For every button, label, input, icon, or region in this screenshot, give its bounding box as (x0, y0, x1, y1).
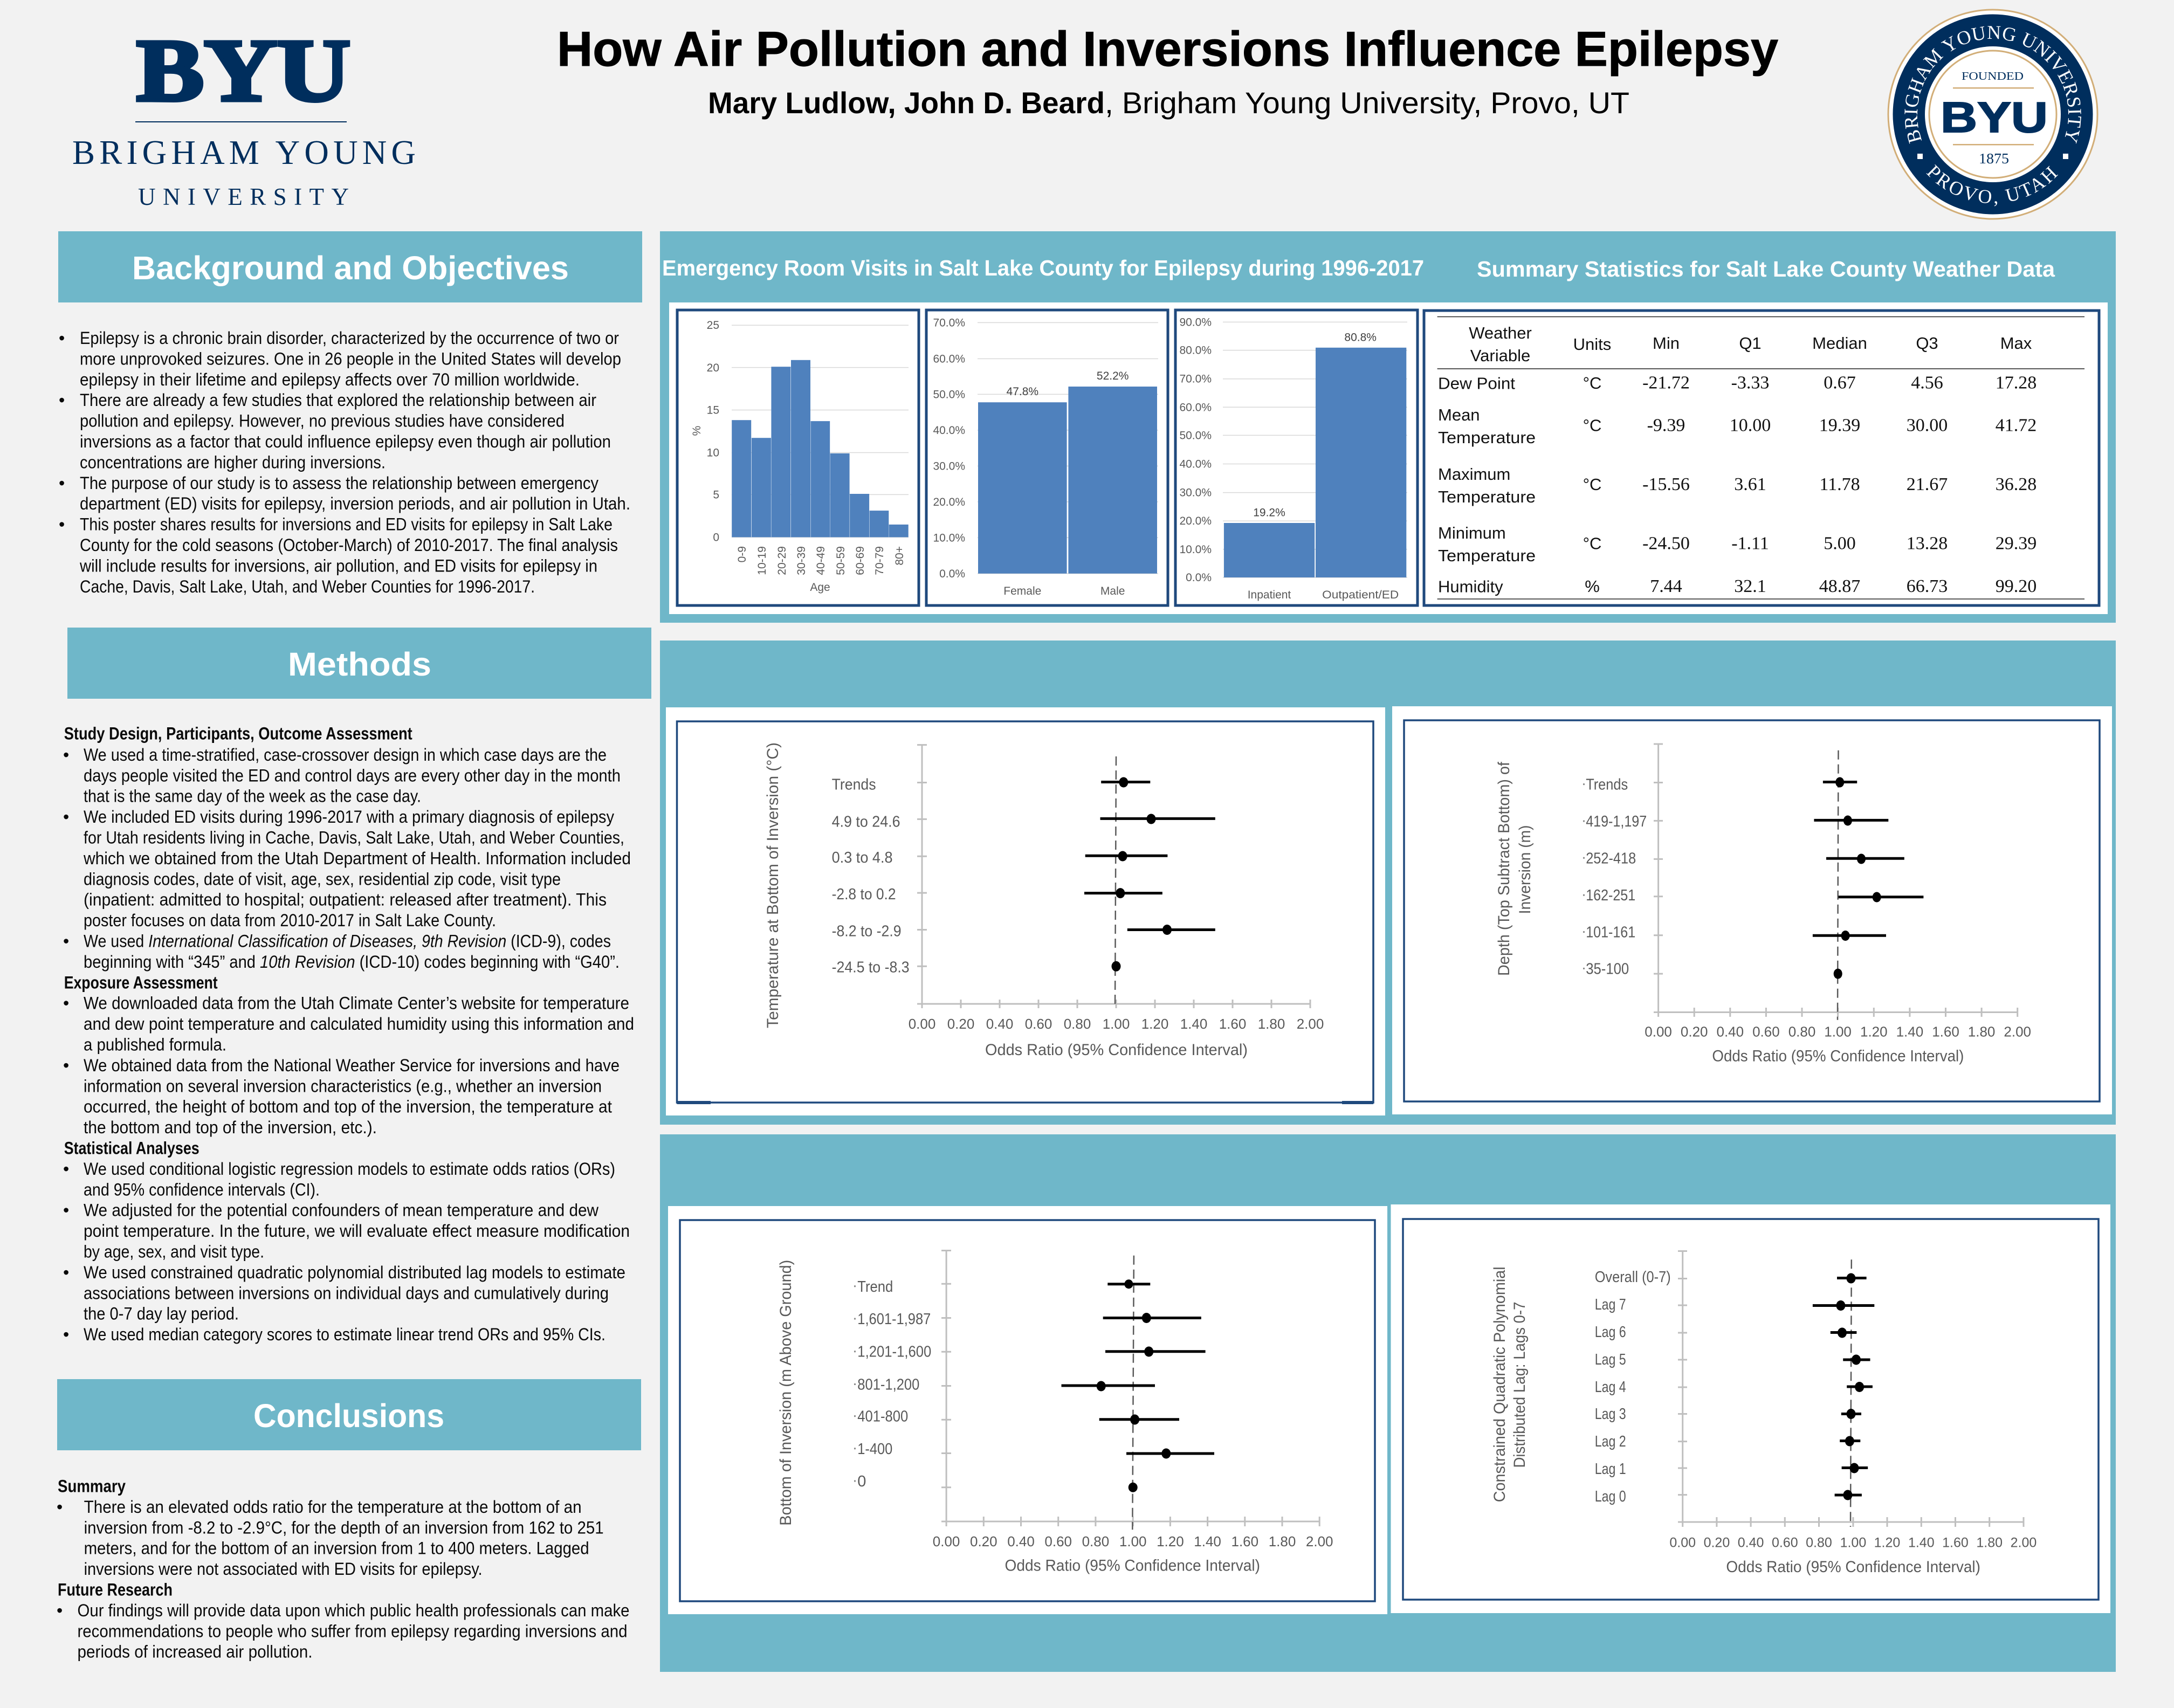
text block: study design: which we obtained from the Utah Department of Health. Information included (83, 849, 631, 868)
text block: statistical analyses: We used constrained quadratic polynomial distributed lag models to estimate (84, 1263, 625, 1282)
bar chart: visit type: 19.2% (1253, 507, 1285, 519)
text block: statistical analyses (63, 1139, 630, 1344)
bar chart: sex distribution: 52.2% (1097, 370, 1129, 382)
heading: conclusions: Conclusions (253, 1397, 444, 1434)
table: summary statistics for weather data: Dew Point (1438, 374, 1515, 392)
forest plot: temperature at bottom of inversion: 4.9 to 24.6 (832, 813, 900, 830)
forest plot: depth of inversion: 162-251 (1586, 887, 1635, 904)
text block: statistical analyses: We used median category scores to estimate linear trend ORs and 95% CIs. (84, 1325, 606, 1344)
table: summary statistics for weather data: 7.44 (1650, 576, 1682, 596)
bar chart: age distribution: 15 (707, 404, 719, 416)
forest plot: temperature at bottom of inversion: 1.40 (1180, 1016, 1207, 1032)
panel: background and objectives (58, 231, 642, 596)
text block: summary: Summary (58, 1476, 126, 1496)
text block: future research: • (57, 1601, 63, 1620)
forest plot: bottom of inversion: 2.00 (1306, 1533, 1333, 1549)
text block: study design: We used a time-stratified, case-crossover design in which case days are the (84, 745, 607, 765)
forest plot: distributed lag: Constrained Quadratic Polynomial (1491, 1266, 1509, 1502)
forest plot: distributed lag: Odds Ratio (95% Confidence Interval) (1726, 1558, 1980, 1576)
forest plot: depth of inversion (1404, 720, 2100, 1101)
table: summary statistics for weather data: 19.39 (1819, 415, 1860, 436)
table: summary statistics for weather data (1424, 311, 2099, 605)
authors and affiliation: , Brigham Young University, Provo, UT (1105, 86, 1629, 120)
text block: exposure assessment: • (63, 994, 69, 1013)
forest plot: temperature at bottom of inversion (677, 721, 1373, 1103)
bar chart: sex distribution: Female (1003, 585, 1041, 597)
text block: background bullets: department (ED) visits for epilepsy, inversion periods, and air pollution in Utah. (80, 494, 630, 513)
forest plot: distributed lag: 1.60 (1942, 1535, 1969, 1551)
bar chart: visit type: 10.0% (1179, 543, 1212, 556)
text block: background bullets: • (59, 390, 65, 410)
text block: future research (57, 1580, 630, 1662)
forest plot: bottom of inversion: 1-400 (857, 1441, 892, 1458)
bar chart: age distribution: 60-69 (854, 546, 866, 575)
bar chart: age distribution (677, 310, 919, 605)
forest plot: distributed lag: Distributed Lag: Lags 0-7 (1511, 1301, 1529, 1468)
table: summary statistics for weather data: 36.28 (1996, 474, 2037, 494)
forest plot: bottom of inversion: Bottom of Inversion (m Above Ground) (777, 1260, 795, 1526)
bar chart: sex distribution: 20.0% (933, 496, 965, 508)
text block: exposure assessment: • (63, 1056, 69, 1075)
icon: BYU seal: PROVO, UTAH (1926, 164, 2058, 206)
text block: statistical analyses: • (63, 1159, 69, 1179)
text block: study design: • (63, 932, 69, 951)
forest plot: temperature at bottom of inversion: 0.40 (986, 1016, 1013, 1032)
table: summary statistics for weather data: Minimum (1438, 524, 1506, 542)
forest plot: distributed lag: Lag 3 (1595, 1406, 1626, 1423)
table: summary statistics for weather data: 3.61 (1734, 474, 1766, 494)
bar chart: visit type: 50.0% (1179, 429, 1212, 442)
table: summary statistics for weather data: 30.00 (1907, 415, 1948, 436)
forest plot: depth of inversion: 0.20 (1681, 1023, 1708, 1039)
text block: statistical analyses: Statistical Analyses (64, 1139, 199, 1158)
forest plot: depth of inversion: Trends (1586, 776, 1628, 794)
forest plot: distributed lag (1403, 1219, 2099, 1600)
text block: exposure assessment: and dew point temperature and calculated humidity using this information and (84, 1014, 634, 1034)
table: summary statistics for weather data: Variable (1470, 346, 1530, 365)
forest plot: distributed lag: Lag 6 (1595, 1324, 1626, 1341)
forest plot: distributed lag: 0.80 (1806, 1535, 1832, 1551)
forest plot: distributed lag: Overall (0-7) (1595, 1269, 1671, 1286)
icon: BYU seal: BRIGHAM YOUNG UNIVERSITY (1904, 26, 2081, 144)
forest plot: temperature at bottom of inversion: 1.60 (1219, 1016, 1246, 1032)
forest plot: distributed lag: Lag 7 (1595, 1296, 1626, 1313)
forest plot: distributed lag: Lag 0 (1595, 1488, 1626, 1505)
text block: future research: Future Research (58, 1580, 173, 1599)
heading: methods: Methods (288, 646, 431, 683)
text block: summary: • (57, 1497, 63, 1517)
forest plot: bottom of inversion: 1.80 (1269, 1533, 1296, 1549)
table: summary statistics for weather data: -24.50 (1642, 534, 1690, 553)
bar chart: visit type: 80.8% (1344, 332, 1377, 344)
bar chart: sex distribution: Male (1100, 585, 1125, 597)
bar chart: sex distribution: 50.0% (933, 388, 965, 401)
forest plot: bottom of inversion: 1.00 (1119, 1533, 1147, 1549)
table: summary statistics for weather data: Min (1653, 334, 1680, 353)
bar chart: age distribution: 5 (713, 488, 719, 501)
text block: summary: There is an elevated odds ratio for the temperature at the bottom of an (84, 1497, 582, 1517)
forest plot: bottom of inversion: 0.00 (933, 1533, 960, 1549)
forest plot: distributed lag: 0.20 (1704, 1535, 1730, 1551)
forest plot: depth of inversion: 1.00 (1824, 1023, 1852, 1039)
forest plot: distributed lag: 0.40 (1738, 1535, 1764, 1551)
forest plot: distributed lag: 1.20 (1874, 1535, 1900, 1551)
text block: background bullets: This poster shares results for inversions and ED visits for epilepsy in Salt Lake (80, 515, 613, 534)
text block: exposure assessment: We downloaded data from the Utah Climate Center’s website for temperature (84, 994, 629, 1013)
forest plot: depth of inversion: 101-161 (1586, 924, 1635, 941)
icon: BYU seal (1887, 9, 2099, 220)
text block: study design: • (63, 745, 69, 765)
table: summary statistics for weather data: -1.11 (1731, 534, 1769, 553)
forest plot: distributed lag: 2.00 (2011, 1535, 2037, 1551)
forest plot: depth of inversion: 1.60 (1932, 1023, 1959, 1039)
panel: conclusions (57, 1379, 641, 1662)
bar chart: age distribution: 20-29 (776, 546, 788, 575)
bar chart: sex distribution: 30.0% (933, 460, 965, 472)
forest plot: depth of inversion: 0.60 (1752, 1023, 1780, 1039)
bar chart: visit type: 70.0% (1179, 373, 1212, 385)
table: summary statistics for weather data: Weather (1469, 323, 1532, 342)
logo: BYU wordmark (72, 21, 416, 210)
bar chart: sex distribution: 40.0% (933, 424, 965, 437)
heading: emergency room visits: Emergency Room Visits in Salt Lake County for Epilepsy during 1996-2017 (662, 256, 1424, 280)
table: summary statistics for weather data: Q1 (1739, 334, 1762, 353)
forest plot: bottom of inversion: 401-800 (857, 1408, 908, 1425)
forest plot: bottom of inversion: 1.20 (1157, 1533, 1184, 1549)
text block: exposure assessment: information on several inversion characteristics (e.g., whether an inversion (84, 1076, 602, 1096)
bar chart: sex distribution: 0.0% (939, 568, 965, 580)
table: summary statistics for weather data: -21.72 (1642, 373, 1690, 392)
bar chart: age distribution: 30-39 (795, 546, 808, 575)
forest plot: depth of inversion: 1.80 (1968, 1023, 1995, 1039)
text block: background bullets: • (59, 328, 65, 348)
text block: study design: for Utah residents living in Cache, Davis, Salt Lake, Utah, and Weber Counties, (84, 828, 624, 848)
forest plot: distributed lag: Lag 4 (1595, 1379, 1626, 1396)
forest plot: temperature at bottom of inversion: Temperature at Bottom of Inversion (°C) (764, 742, 782, 1028)
authors and affiliation (708, 86, 1629, 120)
table: summary statistics for weather data: 99.20 (1996, 576, 2037, 596)
text block: study design: diagnosis codes, date of visit, age, sex, residential zip code, visit type (84, 869, 561, 889)
forest plot: distributed lag: 0.00 (1669, 1535, 1696, 1551)
bar chart: visit type: 90.0% (1179, 316, 1212, 328)
bar chart: visit type: 80.0% (1179, 345, 1212, 357)
forest plot: depth of inversion: 1.40 (1896, 1023, 1923, 1039)
text block: future research: periods of increased air pollution. (78, 1642, 313, 1662)
forest plot: temperature at bottom of inversion: Trends (832, 776, 876, 794)
table: summary statistics for weather data: -15.56 (1642, 474, 1690, 494)
text block: summary: inversions were not associated with ED visits for epilepsy. (84, 1559, 483, 1579)
forest plot: depth of inversion: 35-100 (1586, 960, 1629, 977)
table: summary statistics for weather data: °C (1583, 374, 1601, 392)
text block: background bullets: • (59, 515, 65, 534)
forest plot: distributed lag: Lag 2 (1595, 1433, 1626, 1450)
forest plot: depth of inversion: 0.00 (1645, 1023, 1672, 1039)
text block: statistical analyses: and 95% confidence intervals (CI). (84, 1180, 320, 1199)
text block: statistical analyses: • (63, 1201, 69, 1220)
bar chart: age distribution: 10-19 (756, 546, 768, 575)
text block: study design: • (63, 807, 69, 827)
text block: background bullets: concentrations are higher during inversions. (80, 452, 386, 472)
forest plot: distributed lag: Lag 1 (1595, 1461, 1626, 1478)
table: summary statistics for weather data: 41.72 (1996, 415, 2037, 436)
text block: background bullets: will include results for inversions, air pollution, and ED visits for epilepsy in (79, 556, 597, 575)
forest plot: temperature at bottom of inversion: 1.00 (1103, 1016, 1130, 1032)
forest plot: depth of inversion: 1.20 (1860, 1023, 1888, 1039)
table: summary statistics for weather data: -3.33 (1731, 373, 1769, 392)
forest plot: temperature at bottom of inversion: 2.00 (1297, 1016, 1324, 1032)
forest plot: bottom of inversion: 1,601-1,987 (857, 1311, 931, 1328)
forest plot: temperature at bottom of inversion: 0.00 (909, 1016, 935, 1032)
logo: BYU wordmark: UNIVERSITY (138, 183, 349, 210)
bar chart: age distribution: 10 (707, 446, 719, 459)
forest plot: bottom of inversion (680, 1220, 1375, 1601)
text block: exposure assessment: the bottom and top of the inversion, etc.). (84, 1118, 377, 1137)
bar chart: sex distribution (926, 310, 1168, 605)
text block: background bullets: County for the cold seasons (October-March) of 2010-2017. The final analysis (80, 535, 618, 555)
text block: statistical analyses: • (63, 1325, 69, 1344)
text block: summary: inversion from -8.2 to -2.9°C, for the depth of an inversion from 162 to 251 (84, 1518, 604, 1537)
bar chart: age distribution: 0-9 (736, 546, 748, 562)
logo: BYU wordmark: BRIGHAM YOUNG (72, 134, 416, 171)
forest plot: bottom of inversion: 801-1,200 (857, 1376, 919, 1393)
text block: exposure assessment (63, 973, 634, 1137)
forest plot: depth of inversion: Odds Ratio (95% Confidence Interval) (1712, 1048, 1964, 1065)
text block: study design: Study Design, Participants, Outcome Assessment (64, 724, 412, 743)
bar chart: visit type: 40.0% (1179, 458, 1212, 470)
text block: background bullets: There are already a few studies that explored the relationship between air (80, 390, 596, 410)
forest plot: bottom of inversion: 1,201-1,600 (857, 1344, 931, 1361)
text block: summary: meters, and for the bottom of an inversion from 1 to 400 meters. Lagged (84, 1539, 589, 1558)
forest plot: distributed lag: 1.00 (1840, 1535, 1866, 1551)
heading: methods (67, 628, 651, 699)
icon: BYU seal: FOUNDED (1962, 70, 2024, 82)
forest plot: temperature at bottom of inversion: 1.20 (1141, 1016, 1168, 1032)
heading: background and objectives (58, 231, 642, 302)
table: summary statistics for weather data: 21.67 (1907, 474, 1948, 494)
text block: study design: We included ED visits during 1996-2017 with a primary diagnosis of epilepsy (84, 807, 614, 827)
title: How Air Pollution and Inversions Influence Epilepsy (557, 22, 1778, 77)
forest plot: distributed lag: 1.40 (1908, 1535, 1935, 1551)
text block: background bullets: Epilepsy is a chronic brain disorder, characterized by the occurrence of two or (80, 328, 619, 348)
bar chart: visit type: 60.0% (1179, 401, 1212, 414)
bar chart: age distribution: 0 (713, 532, 719, 543)
text block: study design: poster focuses on data from 2010-2017 in Salt Lake County. (84, 911, 496, 930)
text block: background bullets (59, 328, 630, 596)
text block: study design: beginning with “345” and 10th Revision (ICD-10) codes beginning with “G40”. (84, 952, 620, 972)
bar chart: age distribution: 50-59 (835, 546, 847, 575)
text block: background bullets: pollution and epilepsy. However, no previous studies have considered (80, 411, 565, 431)
forest plot: temperature at bottom of inversion: -2.8 to 0.2 (832, 886, 896, 903)
bar chart: sex distribution: 47.8% (1007, 385, 1038, 398)
bar chart: age distribution: 25 (707, 319, 719, 332)
forest plot: distributed lag: 0.60 (1772, 1535, 1798, 1551)
text block: study design: (inpatient: admitted to hospital; outpatient: released after treatment). This (84, 890, 607, 910)
table: summary statistics for weather data: °C (1583, 475, 1601, 494)
bar chart: visit type: 0.0% (1186, 571, 1212, 584)
table: summary statistics for weather data: 4.56 (1911, 373, 1943, 392)
text block: study design: days people visited the ED and control days are every other day in the month (84, 766, 621, 785)
forest plot: bottom of inversion: 0.20 (970, 1533, 997, 1549)
forest plot: temperature at bottom of inversion: 0.60 (1025, 1016, 1052, 1032)
bar chart: sex distribution: 70.0% (933, 316, 965, 329)
text block: background bullets: The purpose of our study is to assess the relationship between emergency (80, 473, 598, 493)
table: summary statistics for weather data: Temperature (1438, 487, 1536, 506)
panel: methods (63, 628, 651, 1344)
table: summary statistics for weather data: 66.73 (1907, 576, 1948, 596)
text block: background bullets: • (59, 473, 65, 493)
forest plot: distributed lag: Lag 5 (1595, 1351, 1626, 1368)
table: summary statistics for weather data: 17.28 (1996, 373, 2037, 392)
table: summary statistics for weather data: 0.67 (1824, 373, 1856, 392)
table: summary statistics for weather data: 11.78 (1819, 474, 1860, 494)
forest plot: bottom of inversion: 0.80 (1082, 1533, 1109, 1549)
table: summary statistics for weather data: Humidity (1438, 577, 1503, 596)
text block: background bullets: Cache, Davis, Salt Lake, Utah, and Weber Counties for 1996-2017. (80, 577, 535, 596)
text block: study design: We used International Classification of Diseases, 9th Revision (ICD-9), codes (84, 932, 611, 951)
forest plot: depth of inversion: 2.00 (2004, 1023, 2031, 1039)
panel: inversion temperature and depth charts (660, 640, 2116, 1125)
text block: statistical analyses: by age, sex, and visit type. (84, 1242, 264, 1262)
logo: BYU wordmark: BYU (136, 21, 350, 120)
bar chart: visit type: Inpatient (1248, 589, 1291, 601)
table: summary statistics for weather data: Units (1573, 335, 1611, 354)
heading: conclusions (57, 1379, 641, 1450)
panel: bottom of inversion and lag charts (660, 1134, 2116, 1672)
table: summary statistics for weather data: 48.87 (1819, 576, 1860, 596)
text block: exposure assessment: occurred, the height of bottom and top of the inversion, the temperature at (84, 1097, 612, 1117)
table: summary statistics for weather data: °C (1583, 534, 1601, 553)
text block: exposure assessment: a published formula. (84, 1035, 226, 1055)
table: summary statistics for weather data: °C (1583, 416, 1601, 435)
text block: background bullets: more unprovoked seizures. One in 26 people in the United States will develop (80, 349, 621, 368)
forest plot: distributed lag: 1.80 (1976, 1535, 2003, 1551)
forest plot: bottom of inversion: 0.60 (1044, 1533, 1072, 1549)
forest plot: bottom of inversion: Odds Ratio (95% Confidence Interval) (1005, 1557, 1260, 1575)
text block: background bullets: inversions as a factor that could influence epilepsy even though air pollution (80, 432, 611, 451)
text block: statistical analyses: the 0-7 day lay period. (84, 1304, 239, 1324)
text block: statistical analyses: point temperature. In the future, we will evaluate effect measure modification (84, 1221, 630, 1241)
forest plot: temperature at bottom of inversion: 0.3 to 4.8 (832, 849, 893, 866)
table: summary statistics for weather data: Mean (1438, 405, 1480, 424)
text block: study design (63, 724, 631, 972)
table: summary statistics for weather data: 32.1 (1734, 576, 1766, 596)
text block: study design: that is the same day of the week as the case day. (84, 787, 421, 806)
forest plot: temperature at bottom of inversion: 1.80 (1258, 1016, 1285, 1032)
bar chart: age distribution: 20 (707, 362, 719, 374)
table: summary statistics for weather data: Maximum (1438, 465, 1510, 484)
forest plot: temperature at bottom of inversion: 0.20 (947, 1016, 974, 1032)
table: summary statistics for weather data: -9.39 (1647, 415, 1685, 436)
text block: exposure assessment: We obtained data from the National Weather Service for inversions and have (84, 1056, 620, 1075)
panel: emergency room visits and weather summary (660, 231, 2116, 623)
table: summary statistics for weather data: 13.28 (1907, 534, 1948, 553)
bar chart: age distribution: 70-79 (873, 546, 886, 575)
forest plot: bottom of inversion: 1.40 (1194, 1533, 1221, 1549)
forest plot: depth of inversion: 419-1,197 (1586, 813, 1647, 830)
text block: future research: recommendations to people who suffer from epilepsy regarding inversions and (78, 1621, 628, 1641)
text block: background bullets: epilepsy in their lifetime and epilepsy affects over 70 million worldwide. (80, 370, 580, 389)
table: summary statistics for weather data: 29.39 (1996, 534, 2037, 553)
text block: summary (57, 1476, 604, 1579)
bar chart: visit type: 20.0% (1179, 515, 1212, 527)
bar chart: sex distribution: 60.0% (933, 353, 965, 365)
bar chart: age distribution: Age (810, 581, 830, 594)
forest plot: bottom of inversion: 0.40 (1007, 1533, 1035, 1549)
text block: statistical analyses: We adjusted for the potential confounders of mean temperature and dew (84, 1201, 599, 1220)
icon: BYU seal: BYU (1941, 93, 2048, 141)
bar chart: age distribution: % (691, 426, 703, 436)
forest plot: depth of inversion: 252-418 (1586, 850, 1636, 867)
bar chart: visit type: 30.0% (1179, 487, 1212, 499)
text block: statistical analyses: • (63, 1263, 69, 1282)
text block: future research: Our findings will provide data upon which public health professionals can make (78, 1601, 630, 1620)
bar chart: sex distribution: 10.0% (933, 532, 965, 544)
bar chart: visit type: Outpatient/ED (1322, 589, 1399, 601)
text block: statistical analyses: We used conditional logistic regression models to estimate odds ratios (ORs) (84, 1159, 615, 1179)
bar chart: visit type (1175, 310, 1418, 605)
bar chart: age distribution: 80+ (893, 546, 906, 566)
table: summary statistics for weather data: Temperature (1438, 428, 1536, 447)
table: summary statistics for weather data: % (1585, 577, 1600, 596)
authors and affiliation: Mary Ludlow, John D. Beard (708, 86, 1105, 120)
bar chart: age distribution: 40-49 (815, 546, 827, 575)
forest plot: temperature at bottom of inversion: -8.2 to -2.9 (832, 923, 902, 940)
forest plot: temperature at bottom of inversion: -24.5 to -8.3 (832, 959, 910, 976)
heading: background and objectives: Background and Objectives (132, 250, 569, 286)
icon: BYU seal: 1875 (1979, 150, 2009, 167)
forest plot: temperature at bottom of inversion: Odds Ratio (95% Confidence Interval) (985, 1041, 1248, 1059)
table: summary statistics for weather data: Q3 (1916, 334, 1938, 353)
table: summary statistics for weather data: 5.00 (1824, 534, 1856, 553)
forest plot: bottom of inversion: Trend (857, 1278, 893, 1296)
table: summary statistics for weather data: Median (1812, 334, 1867, 353)
text block: exposure assessment: Exposure Assessment (64, 973, 218, 992)
forest plot: depth of inversion: Inversion (m) (1516, 825, 1534, 914)
forest plot: depth of inversion: 0.80 (1788, 1023, 1815, 1039)
text block: statistical analyses: associations between inversions on individual days and cumulatively during (84, 1283, 609, 1303)
table: summary statistics for weather data: Max (2000, 334, 2032, 353)
table: summary statistics for weather data: Temperature (1438, 546, 1536, 565)
heading: summary statistics: Summary Statistics for Salt Lake County Weather Data (1477, 257, 2055, 281)
forest plot: bottom of inversion: 1.60 (1231, 1533, 1258, 1549)
forest plot: temperature at bottom of inversion: 0.80 (1064, 1016, 1091, 1032)
forest plot: bottom of inversion: 0 (857, 1473, 866, 1490)
forest plot: depth of inversion: Depth (Top Subtract Bottom) of (1495, 761, 1513, 976)
table: summary statistics for weather data: 10.00 (1730, 415, 1771, 436)
forest plot: depth of inversion: 0.40 (1716, 1023, 1744, 1039)
